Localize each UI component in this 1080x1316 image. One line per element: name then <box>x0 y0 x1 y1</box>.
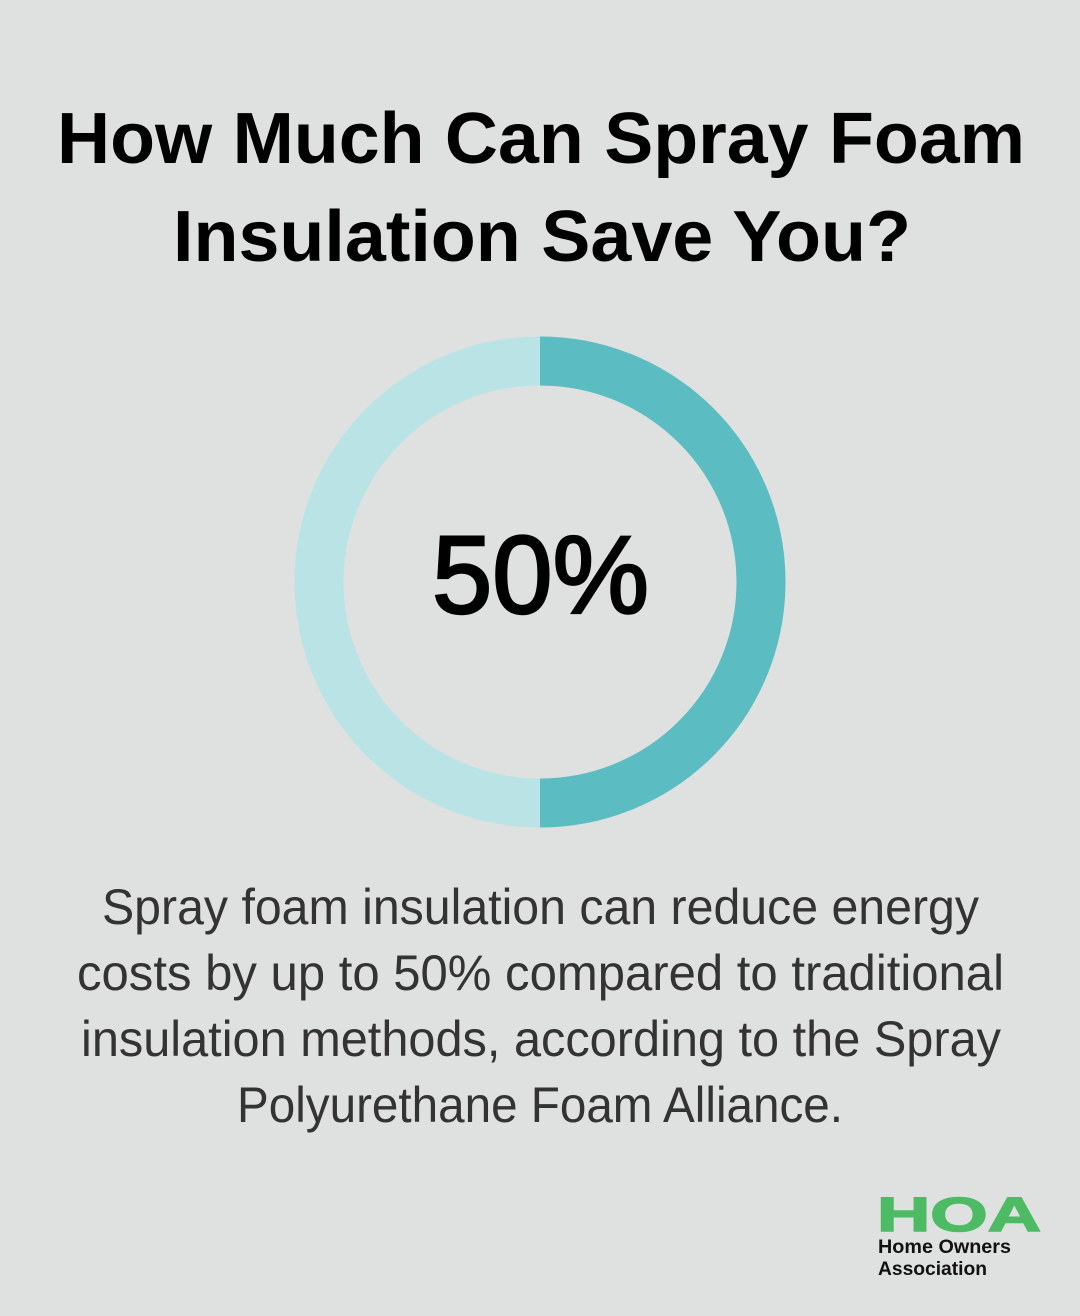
donut chart: 50% <box>319 361 761 803</box>
title: How Much Can Spray Foam <box>57 99 1025 179</box>
logo: HOA Home Owners Association: Home Owners <box>878 1237 1011 1258</box>
description text: Polyurethane Foam Alliance. <box>237 1077 843 1133</box>
donut value: 50% <box>432 514 649 637</box>
description text: costs by up to 50% compared to traditional <box>77 945 1004 1001</box>
logo: HOA Home Owners Association: Association <box>878 1259 987 1280</box>
logo: HOA Home Owners Association: HOA <box>877 1189 1041 1242</box>
title <box>57 99 1025 277</box>
description text: Spray foam insulation can reduce energy <box>102 879 979 935</box>
logo: HOA Home Owners Association <box>877 1189 1041 1280</box>
description text <box>77 879 1004 1133</box>
description text: insulation methods, according to the Spray <box>81 1011 1001 1067</box>
title: Insulation Save You? <box>173 197 911 277</box>
